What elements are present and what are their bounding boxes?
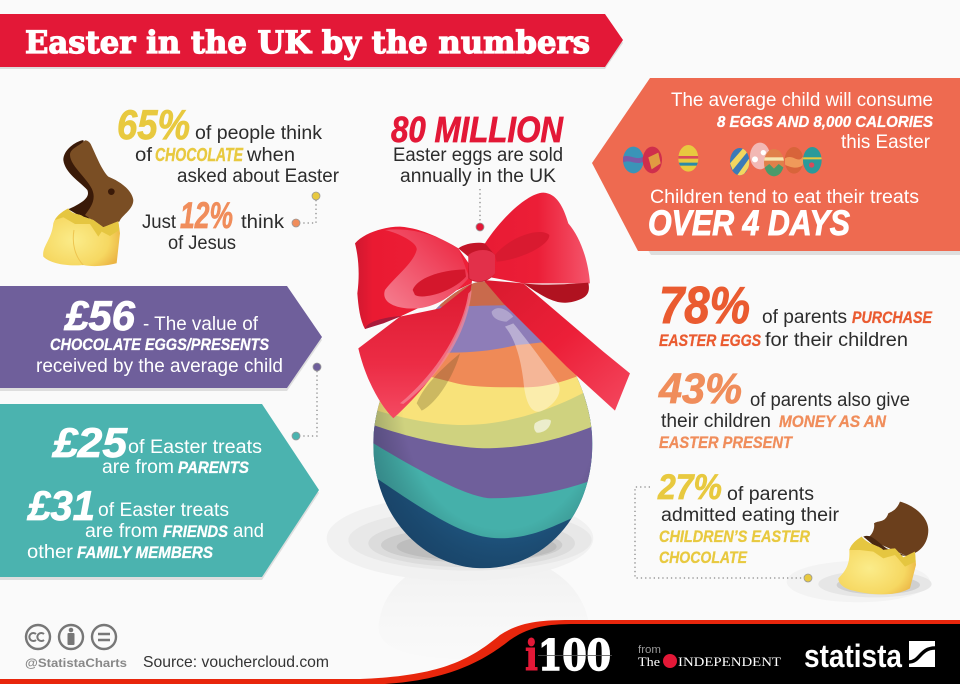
credit: Statista Charts: @StatistaCharts bbox=[25, 656, 127, 670]
panel: teal breakdown: PARENTS bbox=[178, 458, 250, 477]
stat: 43 percent money: of parents also give bbox=[750, 390, 910, 411]
icon: creative commons badges bbox=[26, 625, 116, 649]
logo: i100: 100 bbox=[538, 631, 611, 680]
stat: 80 million eggs bbox=[391, 109, 564, 187]
bow left tail bbox=[358, 283, 472, 418]
panel: orange consumption: OVER 4 DAYS bbox=[648, 204, 850, 243]
bow knot bbox=[458, 243, 495, 282]
stat: 65 percent chocolate: of people think bbox=[195, 123, 323, 144]
£56 text: £56 bbox=[63, 292, 136, 339]
panel: purple value of presents: received by the average child bbox=[36, 356, 283, 377]
footer band bbox=[0, 620, 960, 684]
panel: teal breakdown: of Easter treats bbox=[128, 437, 262, 458]
stat: 43 percent money: EASTER PRESENT bbox=[659, 433, 793, 452]
logo: from The Independent bbox=[638, 644, 781, 669]
£31 text: £31 bbox=[26, 482, 95, 529]
connector: purple to teal bbox=[292, 363, 321, 440]
bow right loop bbox=[473, 193, 590, 283]
stat: 12 percent Jesus: 12% bbox=[180, 195, 233, 236]
connector: chocolate to Jesus bbox=[292, 192, 320, 227]
stat: 12 percent Jesus: Just bbox=[142, 212, 177, 233]
illustration: rainbow egg with bow bbox=[355, 193, 630, 572]
consumption text: The average child will consume bbox=[671, 90, 933, 111]
stat: 12 percent Jesus bbox=[142, 195, 285, 254]
bow right tail bbox=[483, 280, 630, 411]
panel: teal breakdown: and bbox=[233, 521, 264, 542]
bow left loop bbox=[355, 227, 473, 329]
panel: purple value of presents: - The value of bbox=[143, 314, 259, 335]
stat: 80 million eggs: annually in the UK bbox=[400, 166, 556, 187]
icon: eaten chocolate bunny bbox=[787, 502, 932, 602]
stat: 65 percent chocolate: 65% bbox=[117, 101, 190, 148]
stat: 65 percent chocolate: asked about Easter bbox=[177, 166, 340, 187]
£25 text: £25 bbox=[51, 419, 128, 466]
egg highlight bbox=[505, 323, 560, 412]
stat: 78 percent purchase: for their children bbox=[765, 330, 908, 351]
icon: chocolate bunny bbox=[43, 140, 133, 266]
stat: 12 percent Jesus: think bbox=[241, 212, 285, 233]
stat: 27 percent ate chocolate: CHOCOLATE bbox=[659, 548, 748, 567]
stat: 43 percent money bbox=[658, 365, 910, 452]
logo: statista: statista bbox=[804, 638, 902, 674]
stat: 27 percent ate chocolate: of parents bbox=[727, 484, 814, 505]
stat: 43 percent money: their children bbox=[661, 411, 771, 432]
panel: teal breakdown: of Easter treats bbox=[98, 500, 229, 521]
panel: teal breakdown: are from bbox=[102, 457, 174, 478]
stat: 78 percent purchase: PURCHASE bbox=[852, 308, 933, 327]
egg shadow and reflection bbox=[327, 496, 593, 660]
panel: purple value of presents bbox=[0, 286, 322, 391]
stat: 65 percent chocolate: of bbox=[135, 145, 153, 166]
panel: orange consumption: this Easter bbox=[841, 132, 931, 153]
stat: 65 percent chocolate bbox=[117, 101, 340, 187]
panel: orange consumption: 8 EGGS AND 8,000 CALORIES bbox=[717, 114, 933, 131]
logo: from The Independent: INDEPENDENT bbox=[678, 654, 781, 669]
stat: 80 million eggs: 80 MILLION bbox=[391, 109, 564, 150]
stat: 78 percent purchase: EASTER EGGS bbox=[659, 331, 762, 350]
icon: row of decorated eggs bbox=[622, 142, 823, 178]
connector: 80 million to egg bbox=[476, 189, 484, 231]
duration text: Children tend to eat their treats bbox=[650, 187, 919, 208]
logo: from The Independent: The bbox=[638, 654, 660, 669]
title: Easter in the UK by the numbers bbox=[25, 25, 590, 61]
panel: orange consumption bbox=[592, 78, 960, 255]
panel: purple value of presents: CHOCOLATE EGGS/PRESENTS bbox=[50, 335, 270, 354]
panel: teal breakdown: FRIENDS bbox=[163, 522, 229, 541]
connector: 27 percent to chocolate bbox=[635, 487, 812, 582]
logo: from The Independent: from bbox=[638, 644, 661, 656]
stat: 27 percent ate chocolate: CHILDREN’S EASTER bbox=[659, 527, 811, 546]
stat: 27 percent ate chocolate: 27% bbox=[657, 468, 722, 507]
stat: 78 percent purchase: 78% bbox=[659, 277, 750, 335]
stat: 65 percent chocolate: CHOCOLATE bbox=[155, 145, 244, 165]
stat: 43 percent money: 43% bbox=[658, 365, 742, 413]
title banner bbox=[0, 14, 623, 69]
panel: teal breakdown: are from bbox=[85, 521, 158, 542]
stat: 78 percent purchase bbox=[659, 277, 933, 351]
stat: 80 million eggs: Easter eggs are sold bbox=[393, 145, 563, 166]
stat: 65 percent chocolate: when bbox=[246, 145, 295, 166]
egg bands bbox=[370, 273, 597, 572]
source line: Source: vouchercloud.com bbox=[143, 654, 329, 671]
logo: i100: i bbox=[525, 631, 538, 680]
panel: teal breakdown: other bbox=[27, 542, 74, 563]
stat: 27 percent ate chocolate: admitted eating their bbox=[661, 505, 840, 526]
panel: teal breakdown: FAMILY MEMBERS bbox=[77, 543, 214, 562]
stat: 78 percent purchase: of parents bbox=[762, 307, 847, 328]
stat: 27 percent ate chocolate bbox=[657, 468, 840, 567]
stat: 43 percent money: MONEY AS AN bbox=[779, 412, 887, 431]
stat: 12 percent Jesus: of Jesus bbox=[168, 233, 236, 254]
panel: teal breakdown bbox=[0, 404, 319, 580]
